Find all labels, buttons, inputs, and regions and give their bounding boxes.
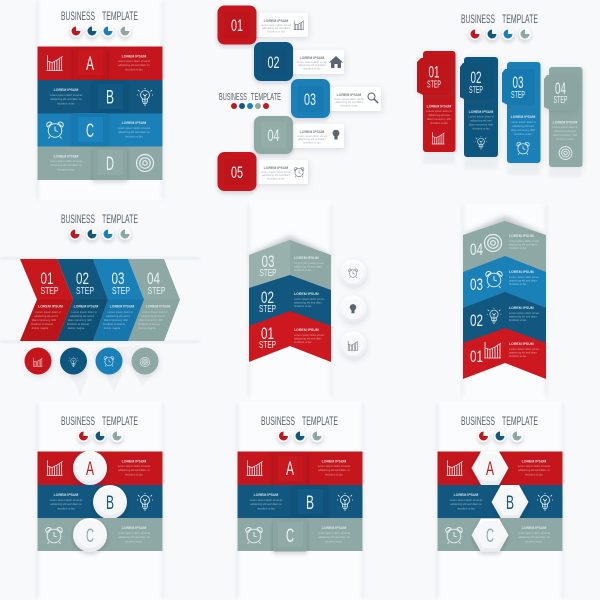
step 05: adipiscing elit sed diam xyxy=(262,173,291,177)
column 04: tincidunt ut lao xyxy=(556,137,574,141)
column 04: 04 xyxy=(555,79,566,98)
chevron 02: dolore magna xyxy=(68,326,85,330)
column 01: diam nonummy nibh xyxy=(427,117,452,121)
pie markers xyxy=(78,430,123,442)
chevron 03: Lorem ipsum dolor sit am xyxy=(294,261,325,265)
column 02 xyxy=(460,57,498,169)
chevron 02: STEP xyxy=(76,285,94,297)
chevron 01: Lorem ipsum dolor sit am xyxy=(294,333,325,337)
band A: Lorem ipsum dolor sit amet xyxy=(518,464,550,468)
band A: Lorem ipsum dolor sit amet xyxy=(118,464,150,468)
band B xyxy=(438,485,562,518)
chevron 02: tincidunt ut lao xyxy=(509,318,527,322)
step 01: LOREM IPSUM xyxy=(264,19,288,23)
pie markers xyxy=(278,430,323,442)
band A: adipiscing elit sed diam no xyxy=(118,63,150,67)
chevron 04: LOREM IPSUM xyxy=(146,304,170,308)
pie markers xyxy=(70,25,131,37)
chevron 01: tincidunt ut laoreet xyxy=(31,322,53,326)
column 01: STEP xyxy=(427,78,441,90)
column 02: LOREM IPSUM xyxy=(469,110,493,114)
chevron 02: STEP xyxy=(259,303,276,315)
band B: adipiscing elit sed diam no xyxy=(250,502,282,506)
chevron 02: 02 xyxy=(261,288,274,307)
band A: tincidunt ut lao xyxy=(125,67,143,71)
heading: TEMPLATE xyxy=(251,92,281,103)
chevron 01 xyxy=(463,328,546,379)
chevron 03: adipiscing elit sed diam xyxy=(509,278,538,282)
panel: stacked chevrons 01 to 03 xyxy=(249,200,366,400)
band A: A xyxy=(86,458,94,480)
column 01: LOREM IPSUM xyxy=(427,104,451,108)
chevron 03: dolore magna xyxy=(104,326,121,330)
chevron 01: tincidunt ut lao xyxy=(509,354,527,358)
column 03: tincidunt ut lao xyxy=(514,132,532,136)
chevron 04: LOREM IPSUM xyxy=(509,234,534,238)
band A xyxy=(38,451,162,485)
chevron 03: tincidunt ut lao xyxy=(509,282,527,286)
chevron 04: adipiscing elit sed diam xyxy=(509,242,538,246)
band C: adipiscing elit sed diam no xyxy=(118,535,150,539)
step 04: 04 xyxy=(268,126,280,145)
band A: adipiscing elit sed diam no xyxy=(518,468,550,472)
step 04: tincidunt ut lao xyxy=(303,140,321,144)
band A: A xyxy=(86,53,94,75)
chevron 01: 01 xyxy=(470,347,483,366)
column 04: LOREM IPSUM xyxy=(553,120,577,124)
heading: BUSINESS xyxy=(61,11,95,23)
chevron 03: tincidunt ut lao xyxy=(294,268,312,272)
panel: stacked chevrons 01 to 04 xyxy=(463,204,546,400)
pie markers xyxy=(478,430,523,442)
chevron 04: Lorem ipsum dolor sit am xyxy=(509,239,540,243)
panel: four step columns xyxy=(417,14,582,177)
band A xyxy=(238,452,362,485)
band C: Lorem ipsum dolor sit amet xyxy=(318,531,350,535)
chevron 02: 02 xyxy=(76,269,89,288)
band B: tincidunt ut lao xyxy=(57,506,75,510)
chevron 02: LOREM IPSUM xyxy=(509,306,534,310)
band A: LOREM IPSUM xyxy=(322,460,346,464)
panel: numbered cards 01 to 05 xyxy=(218,6,381,191)
step 01: tincidunt ut lao xyxy=(267,29,285,33)
chevron 04: adipiscing elit sed d xyxy=(141,314,165,318)
chevron 03: tincidunt ut laoreet xyxy=(103,322,125,326)
chevron 02: LOREM IPSUM xyxy=(74,304,98,308)
step 03: adipiscing elit sed diam xyxy=(335,100,364,104)
step 03: LOREM IPSUM xyxy=(337,93,361,97)
band C: C xyxy=(486,525,494,547)
chevron 03: adipiscing elit sed diam xyxy=(294,264,323,268)
step 01: adipiscing elit sed diam xyxy=(262,26,291,30)
chevron 01: Lorem ipsum dolor si xyxy=(36,310,61,314)
chevron 02: adipiscing elit sed diam xyxy=(509,314,538,318)
chevron 03: LOREM IPSUM xyxy=(509,270,534,274)
chevron 03: Lorem ipsum dolor sit am xyxy=(509,275,540,279)
chevron 04 xyxy=(128,259,180,341)
step 02: Lorem ipsum dolor sit am xyxy=(297,60,328,64)
world map backdrop xyxy=(68,345,152,396)
band C: tincidunt ut lao xyxy=(325,539,343,543)
band C: adipiscing elit sed diam no xyxy=(118,130,150,134)
pie markers xyxy=(69,228,131,240)
heading: BUSINESS xyxy=(219,92,247,103)
chevron 04 xyxy=(463,221,546,285)
band A: tincidunt ut lao xyxy=(125,472,143,476)
chevron 01: 01 xyxy=(261,324,274,343)
band D: LOREM IPSUM xyxy=(54,154,78,158)
chevron 03: STEP xyxy=(112,285,130,297)
chevron 04: tincidunt ut laoreet xyxy=(138,322,160,326)
chevron 03: 03 xyxy=(470,275,483,294)
heading: TEMPLATE xyxy=(102,11,138,23)
chevron 03: STEP xyxy=(260,267,276,279)
chevron 03 xyxy=(249,240,331,300)
column 01 xyxy=(417,51,456,164)
chevron 03: adipiscing elit sed d xyxy=(106,314,130,318)
band C: tincidunt ut lao xyxy=(125,539,143,543)
column 02: tincidunt ut lao xyxy=(472,126,490,130)
column 02: adipiscing elit sed xyxy=(470,118,492,122)
step 03 xyxy=(291,79,381,118)
step 05: Lorem ipsum dolor sit am xyxy=(261,170,292,174)
band B: Lorem ipsum dolor sit amet xyxy=(250,498,282,502)
chevron 01: adipiscing elit sed diam xyxy=(509,350,538,354)
heading: TEMPLATE xyxy=(502,416,538,428)
band C xyxy=(38,113,162,146)
step 04 xyxy=(254,116,344,154)
band C: C xyxy=(86,120,94,142)
band B: B xyxy=(506,492,514,514)
chevron 01: tincidunt ut lao xyxy=(294,340,312,344)
band A xyxy=(38,46,162,80)
column 03: 03 xyxy=(512,73,524,92)
chevron 02 xyxy=(57,259,108,341)
chevron 04: STEP xyxy=(148,285,166,297)
chevron 03: 03 xyxy=(262,252,274,271)
step 04: LOREM IPSUM xyxy=(300,130,324,134)
band A xyxy=(438,452,562,485)
column 04: adipiscing elit sed xyxy=(554,129,576,133)
column 02: diam nonummy nibh xyxy=(469,122,494,126)
band A: tincidunt ut lao xyxy=(525,472,543,476)
column 04 xyxy=(544,67,582,177)
band C xyxy=(238,518,362,552)
chevron 02: Lorem ipsum dolor sit am xyxy=(509,311,540,315)
panel: squares A to C xyxy=(238,402,363,600)
step 05: LOREM IPSUM xyxy=(264,166,288,170)
step 05: tincidunt ut lao xyxy=(267,176,285,180)
colour dots xyxy=(231,103,269,109)
chevron 01: LOREM IPSUM xyxy=(294,328,319,332)
band A: LOREM IPSUM xyxy=(122,460,146,464)
band B: tincidunt ut lao xyxy=(57,101,75,105)
chevron 03 xyxy=(93,259,144,341)
heading: BUSINESS xyxy=(261,416,295,428)
chevron 01: dolore magna xyxy=(32,326,49,330)
heading: TEMPLATE xyxy=(102,214,138,226)
band C: Lorem ipsum dolor sit amet xyxy=(518,531,550,535)
heading: TEMPLATE xyxy=(302,416,338,428)
chevron 01: Lorem ipsum dolor sit am xyxy=(509,347,540,351)
heading: BUSINESS xyxy=(461,416,495,428)
band C: adipiscing elit sed diam no xyxy=(518,535,550,539)
step 02 xyxy=(254,42,344,81)
icon circles xyxy=(340,260,366,358)
chevron 04: Lorem ipsum dolor si xyxy=(143,310,168,314)
band B: adipiscing elit sed diam no xyxy=(450,502,482,506)
column 03 xyxy=(502,62,540,175)
chevron 01: STEP xyxy=(40,285,58,297)
column 03: STEP xyxy=(511,89,525,101)
chevron 02: Lorem ipsum dolor si xyxy=(72,310,97,314)
band C: tincidunt ut lao xyxy=(525,539,543,543)
column 01: Lorem ipsum dolor si xyxy=(427,109,452,113)
band B: tincidunt ut lao xyxy=(457,506,475,510)
band B: Lorem ipsum dolor sit amet xyxy=(450,498,482,502)
step 02: 02 xyxy=(268,53,280,72)
step 02: adipiscing elit sed diam xyxy=(298,63,327,67)
step 02: LOREM IPSUM xyxy=(300,56,324,60)
chevron 02: Lorem ipsum dolor sit am xyxy=(294,297,325,301)
column 01: adipiscing elit sed xyxy=(428,113,450,117)
band A: Lorem ipsum dolor sit amet xyxy=(318,464,350,468)
step 01: 01 xyxy=(231,16,243,35)
column 03: adipiscing elit sed xyxy=(512,124,534,128)
chevron 02: tincidunt ut lao xyxy=(294,304,312,308)
step 04: Lorem ipsum dolor sit am xyxy=(297,134,328,138)
band D: adipiscing elit sed diam no xyxy=(50,163,82,167)
chevron 01: STEP xyxy=(259,339,276,351)
chevron 03 xyxy=(463,256,546,320)
band B: Lorem ipsum dolor sit amet xyxy=(50,498,82,502)
band B: Lorem ipsum dolor sit amet xyxy=(50,93,82,97)
band A: Lorem ipsum dolor sit amet xyxy=(118,59,150,63)
band C: tincidunt ut lao xyxy=(125,134,143,138)
chevron 02: LOREM IPSUM xyxy=(294,292,319,296)
band B: B xyxy=(106,492,114,514)
band A: LOREM IPSUM xyxy=(122,54,146,58)
chevron 02 xyxy=(249,275,331,340)
heading: TEMPLATE xyxy=(502,14,538,26)
band D: Lorem ipsum dolor sit amet xyxy=(50,159,82,163)
band D xyxy=(38,146,162,180)
column 02: 02 xyxy=(470,68,482,87)
chevron 03: diam nonummy nibh xyxy=(104,318,129,322)
chevron 01 xyxy=(20,259,73,341)
chevron 04: dolore magna xyxy=(139,326,156,330)
panel: hexagons A to C xyxy=(438,402,563,600)
step 03: 03 xyxy=(304,90,316,109)
chevron 02: diam nonummy nibh xyxy=(68,318,93,322)
band D: D xyxy=(106,153,114,175)
column 02: STEP xyxy=(469,84,483,96)
chevron 02: tincidunt ut laoreet xyxy=(67,322,89,326)
band C: LOREM IPSUM xyxy=(122,121,146,125)
chevron 02 xyxy=(463,292,546,360)
band C: C xyxy=(286,525,294,547)
chevron 04: 04 xyxy=(470,240,483,259)
step 03: tincidunt ut lao xyxy=(340,103,358,107)
chevron 03: Lorem ipsum dolor si xyxy=(108,310,133,314)
band B xyxy=(238,485,362,518)
column 02: Lorem ipsum dolor si xyxy=(469,114,494,118)
chevron 01 xyxy=(249,311,331,362)
chevron 01: adipiscing elit sed diam xyxy=(294,336,323,340)
chevron 01: LOREM IPSUM xyxy=(38,304,63,308)
chevron 01: diam nonummy nibh xyxy=(32,318,57,322)
band C xyxy=(438,518,562,552)
chevron 04: diam nonummy nibh xyxy=(139,318,164,322)
panel: circles A to C xyxy=(38,402,163,600)
column 01: 01 xyxy=(428,62,440,82)
chevron 01: adipiscing elit sed d xyxy=(34,314,58,318)
column 01: tincidunt ut lao xyxy=(430,121,448,125)
band B: B xyxy=(106,86,114,108)
icon circles xyxy=(24,348,158,374)
heading: TEMPLATE xyxy=(102,416,138,428)
pie markers xyxy=(469,28,531,40)
band A: A xyxy=(486,458,494,480)
step 05: 05 xyxy=(231,163,243,182)
step 04: adipiscing elit sed diam xyxy=(298,137,327,141)
band A: adipiscing elit sed diam no xyxy=(118,468,150,472)
panel: tiles A to D xyxy=(38,0,163,200)
band B: B xyxy=(306,492,314,514)
heading: BUSINESS xyxy=(61,214,95,226)
step 03: Lorem ipsum dolor sit am xyxy=(334,97,365,101)
band C xyxy=(38,518,162,552)
column 04: Lorem ipsum dolor si xyxy=(553,125,578,129)
band A: A xyxy=(286,458,294,480)
chevron 02: 02 xyxy=(470,311,483,330)
band C: LOREM IPSUM xyxy=(322,526,346,530)
chevron 03: LOREM IPSUM xyxy=(294,256,319,260)
column 03: LOREM IPSUM xyxy=(511,115,535,119)
band B: LOREM IPSUM xyxy=(454,493,478,497)
band B: LOREM IPSUM xyxy=(54,493,78,497)
band B xyxy=(38,80,162,114)
band C: Lorem ipsum dolor sit amet xyxy=(118,531,150,535)
chevron 04: tincidunt ut lao xyxy=(509,246,527,250)
step 05 xyxy=(218,152,308,191)
band A: tincidunt ut lao xyxy=(325,472,343,476)
band A: LOREM IPSUM xyxy=(522,460,546,464)
panel: horizontal chevrons xyxy=(0,214,200,396)
chevron 01: LOREM IPSUM xyxy=(509,342,534,346)
band C: Lorem ipsum dolor sit amet xyxy=(118,126,150,130)
band C: LOREM IPSUM xyxy=(122,526,146,530)
band B: adipiscing elit sed diam no xyxy=(50,502,82,506)
column 04: STEP xyxy=(554,94,568,106)
step 02: tincidunt ut lao xyxy=(303,66,321,70)
chevron 02: adipiscing elit sed diam xyxy=(294,300,323,304)
heading: BUSINESS xyxy=(61,416,95,428)
chevron 04: 04 xyxy=(147,269,160,288)
band B: adipiscing elit sed diam no xyxy=(50,97,82,101)
band D: tincidunt ut lao xyxy=(57,167,75,171)
band B: tincidunt ut lao xyxy=(257,506,275,510)
chevron 03: LOREM IPSUM xyxy=(110,304,134,308)
band C: C xyxy=(86,525,94,547)
band A: adipiscing elit sed diam no xyxy=(318,468,350,472)
column 04: diam nonummy nibh xyxy=(553,133,578,137)
chevron 01: 01 xyxy=(40,269,54,288)
step 01: Lorem ipsum dolor sit am xyxy=(261,23,292,27)
band C: adipiscing elit sed diam no xyxy=(318,535,350,539)
band C: LOREM IPSUM xyxy=(522,526,546,530)
band B: LOREM IPSUM xyxy=(254,493,278,497)
heading: BUSINESS xyxy=(461,14,495,26)
chevron 02: adipiscing elit sed d xyxy=(70,314,94,318)
band B: LOREM IPSUM xyxy=(54,88,78,92)
step 01 xyxy=(218,6,308,44)
column 03: Lorem ipsum dolor si xyxy=(511,120,536,124)
chevron 03: 03 xyxy=(112,269,124,288)
band B xyxy=(38,485,162,519)
column 03: diam nonummy nibh xyxy=(511,128,536,132)
